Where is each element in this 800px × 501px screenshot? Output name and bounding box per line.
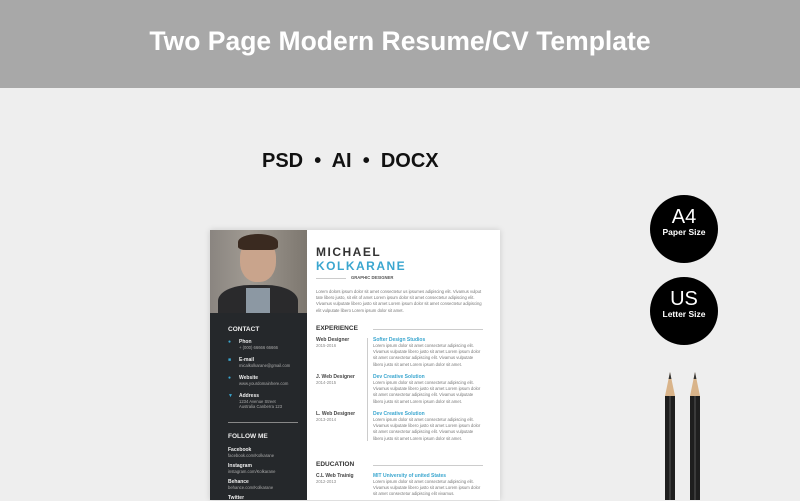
badge: US bbox=[650, 277, 718, 345]
resume paper: C.L Web Trainig bbox=[316, 473, 354, 479]
sidebar: Facebook bbox=[228, 447, 251, 453]
resume paper: Dev Creative Solution bbox=[373, 411, 425, 417]
resume paper: Lorem ipsum dolor sit amet consectetur adipiscing elit. Vivamus vulputate libero justo sit amet Lorem ipsum dolor sit amet consectetur adipiscing elit. Vivamus vulputate libero justo sit amet Lorem ipsum dolor sit amet. bbox=[373, 380, 480, 404]
sidebar bbox=[210, 313, 307, 500]
resume paper bbox=[210, 230, 500, 500]
format list: PSD • AI • DOCX bbox=[262, 150, 439, 172]
follow me: FOLLOW ME bbox=[228, 433, 268, 440]
resume paper: GRAPHIC DESIGNER bbox=[351, 275, 393, 280]
sidebar: Behance bbox=[228, 479, 249, 485]
sidebar: Twitter bbox=[228, 495, 244, 501]
sidebar: E-mail bbox=[239, 357, 254, 363]
resume paper: Lorem ipsum dolor sit amet consectetur adipiscing elit. Vivamus vulputate libero justo sit amet Lorem ipsum dolor sit amet consectetur adipiscing elit. Vivamus vulputate libero justo sit amet Lorem ipsum dolor sit amet. bbox=[373, 417, 480, 441]
sidebar: instagram.com/Kolkarane bbox=[228, 469, 275, 474]
badge: US: Letter Size bbox=[662, 309, 706, 319]
sidebar: 1234 Avenue Street bbox=[239, 399, 276, 404]
resume paper: Dev Creative Solution bbox=[373, 374, 425, 380]
resume paper: 2012-2013 bbox=[316, 479, 336, 484]
icon: pencils bbox=[665, 372, 700, 500]
sidebar: Australia Canberra 123 bbox=[239, 404, 282, 409]
sidebar: facebook.com/Kolkarane bbox=[228, 453, 274, 458]
resume paper: Lorem ipsum dolor sit amet consectetur adipiscing elit. Vivamus vulputate libero justo sit amet Lorem ipsum dolor sit amet consectetur adipiscing elit vivamus. bbox=[373, 479, 480, 496]
resume paper: KOLKARANE bbox=[316, 259, 406, 273]
education: EDUCATION bbox=[316, 461, 354, 468]
resume paper: Lorem ipsum dolor sit amet consectetur adipiscing elit. Vivamus vulputate libero justo sit amet Lorem ipsum dolor sit amet consectetur adipiscing elit. Vivamus vulputate libero justo sit amet Lorem ipsum dolor sit amet. bbox=[373, 343, 480, 367]
badge: A4: A4 bbox=[672, 206, 696, 228]
resume paper: Softer Design Studios bbox=[373, 337, 425, 343]
resume paper: 2013-2014 bbox=[316, 417, 336, 422]
resume paper: L. Web Designer bbox=[316, 411, 355, 417]
contact: CONTACT bbox=[228, 326, 259, 333]
resume paper: Web Designer bbox=[316, 337, 349, 343]
sidebar: www.yourdomainhere.com bbox=[239, 381, 288, 386]
sidebar: Instagram bbox=[228, 463, 252, 469]
experience: EXPERIENCE bbox=[316, 325, 358, 332]
photo bbox=[210, 230, 307, 313]
resume paper: 2014-2015 bbox=[316, 380, 336, 385]
sidebar: ■ bbox=[228, 357, 231, 363]
name: MICHAEL bbox=[316, 245, 381, 259]
sidebar: Website bbox=[239, 375, 258, 381]
sidebar: ● bbox=[228, 375, 231, 381]
sidebar: ▼ bbox=[228, 393, 233, 399]
sidebar: Phon bbox=[239, 339, 252, 345]
resume paper: 2015-2016 bbox=[316, 343, 336, 348]
resume paper: J. Web Designer bbox=[316, 374, 355, 380]
summary: Lorem dolors ipsum dolor sit amet consectetur us ipsumes adipiscing elit. Vivamus vulput tate libero justo, sit elit of amet Lorem ipsum dolor sit amet consectetur adipiscing elit. Vivamus vulputate libero justo sit amet Lorem ipsum dolor sit amet consectetur adipiscing elit vulputate libero Lorem ipsum dolor sit amet. bbox=[316, 289, 482, 313]
badge: US: US bbox=[670, 288, 698, 310]
badge: A4 bbox=[650, 195, 718, 263]
sidebar: micalkolkarane@gmail.com bbox=[239, 363, 290, 368]
title: Two Page Modern Resume/CV Template bbox=[149, 26, 651, 56]
sidebar: ● bbox=[228, 339, 231, 345]
sidebar: Address bbox=[239, 393, 259, 399]
sidebar: + (000) 66666 66666 bbox=[239, 345, 278, 350]
resume paper: MIT University of united States bbox=[373, 473, 446, 479]
badge: A4: Paper Size bbox=[662, 227, 706, 237]
header band bbox=[0, 0, 800, 88]
sidebar: behance.com/Kolkarane bbox=[228, 485, 273, 490]
